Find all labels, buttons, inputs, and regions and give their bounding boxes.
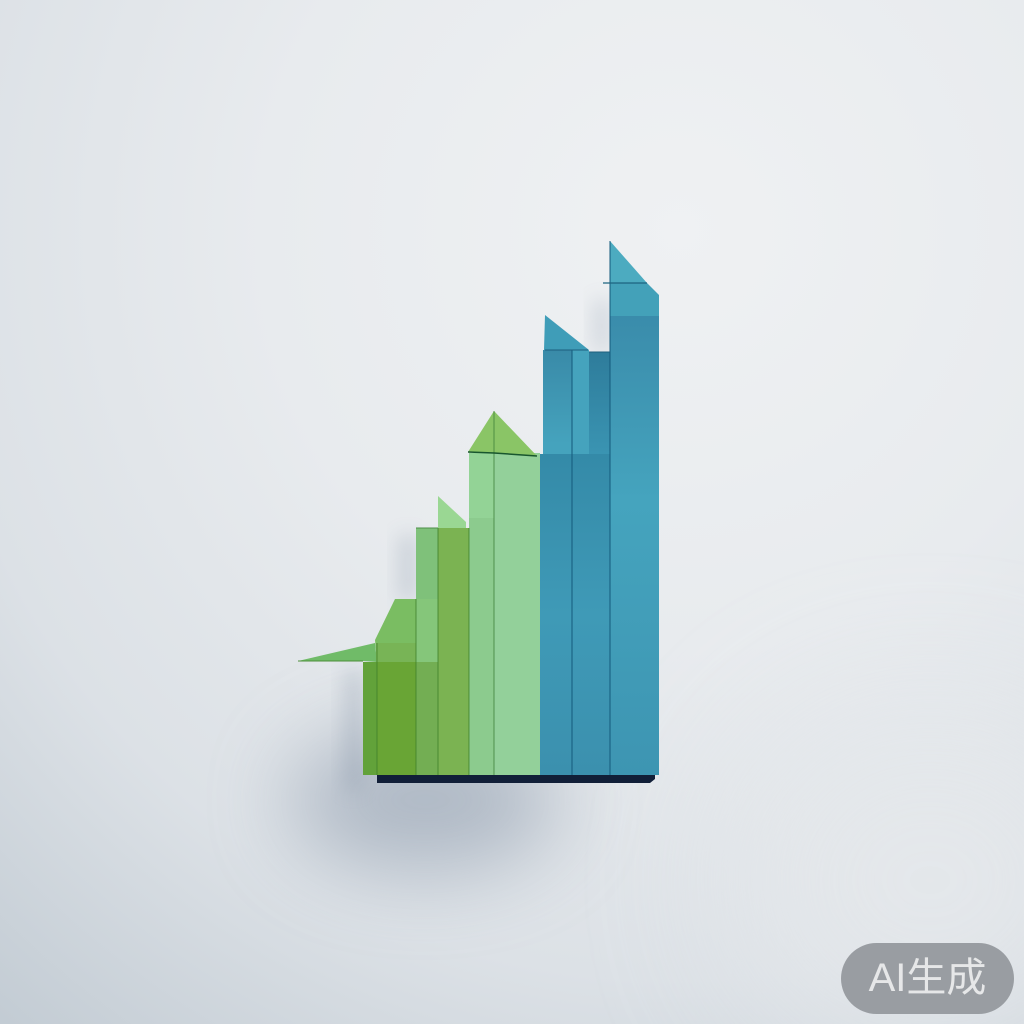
- bar 7: blue: [540, 350, 572, 775]
- bar 9: blue recessed: [589, 352, 610, 454]
- blue arrowhead short: [544, 315, 589, 350]
- badge: AI generated: AI生成: [869, 956, 986, 1000]
- bar 5: light green: [469, 453, 494, 775]
- bar divider lines: [298, 241, 647, 775]
- chart: stepped bars: [298, 241, 659, 783]
- blue arrowhead tall: [610, 241, 647, 283]
- bar 8: blue: [572, 350, 610, 775]
- green arrowhead: [468, 411, 537, 456]
- badge: AI generated: [841, 943, 1014, 1014]
- arrow spike: left: [298, 643, 377, 662]
- bar 4: olive green with triangle: [438, 496, 469, 775]
- bar 1: dark green: [298, 643, 377, 775]
- cast shadow: [290, 300, 609, 870]
- bar 2: green: [375, 599, 416, 775]
- bar 6: light green: [494, 453, 540, 775]
- base plate: [377, 775, 655, 783]
- bar 3: mid green: [416, 528, 438, 775]
- bar 10: tall blue: [610, 283, 659, 775]
